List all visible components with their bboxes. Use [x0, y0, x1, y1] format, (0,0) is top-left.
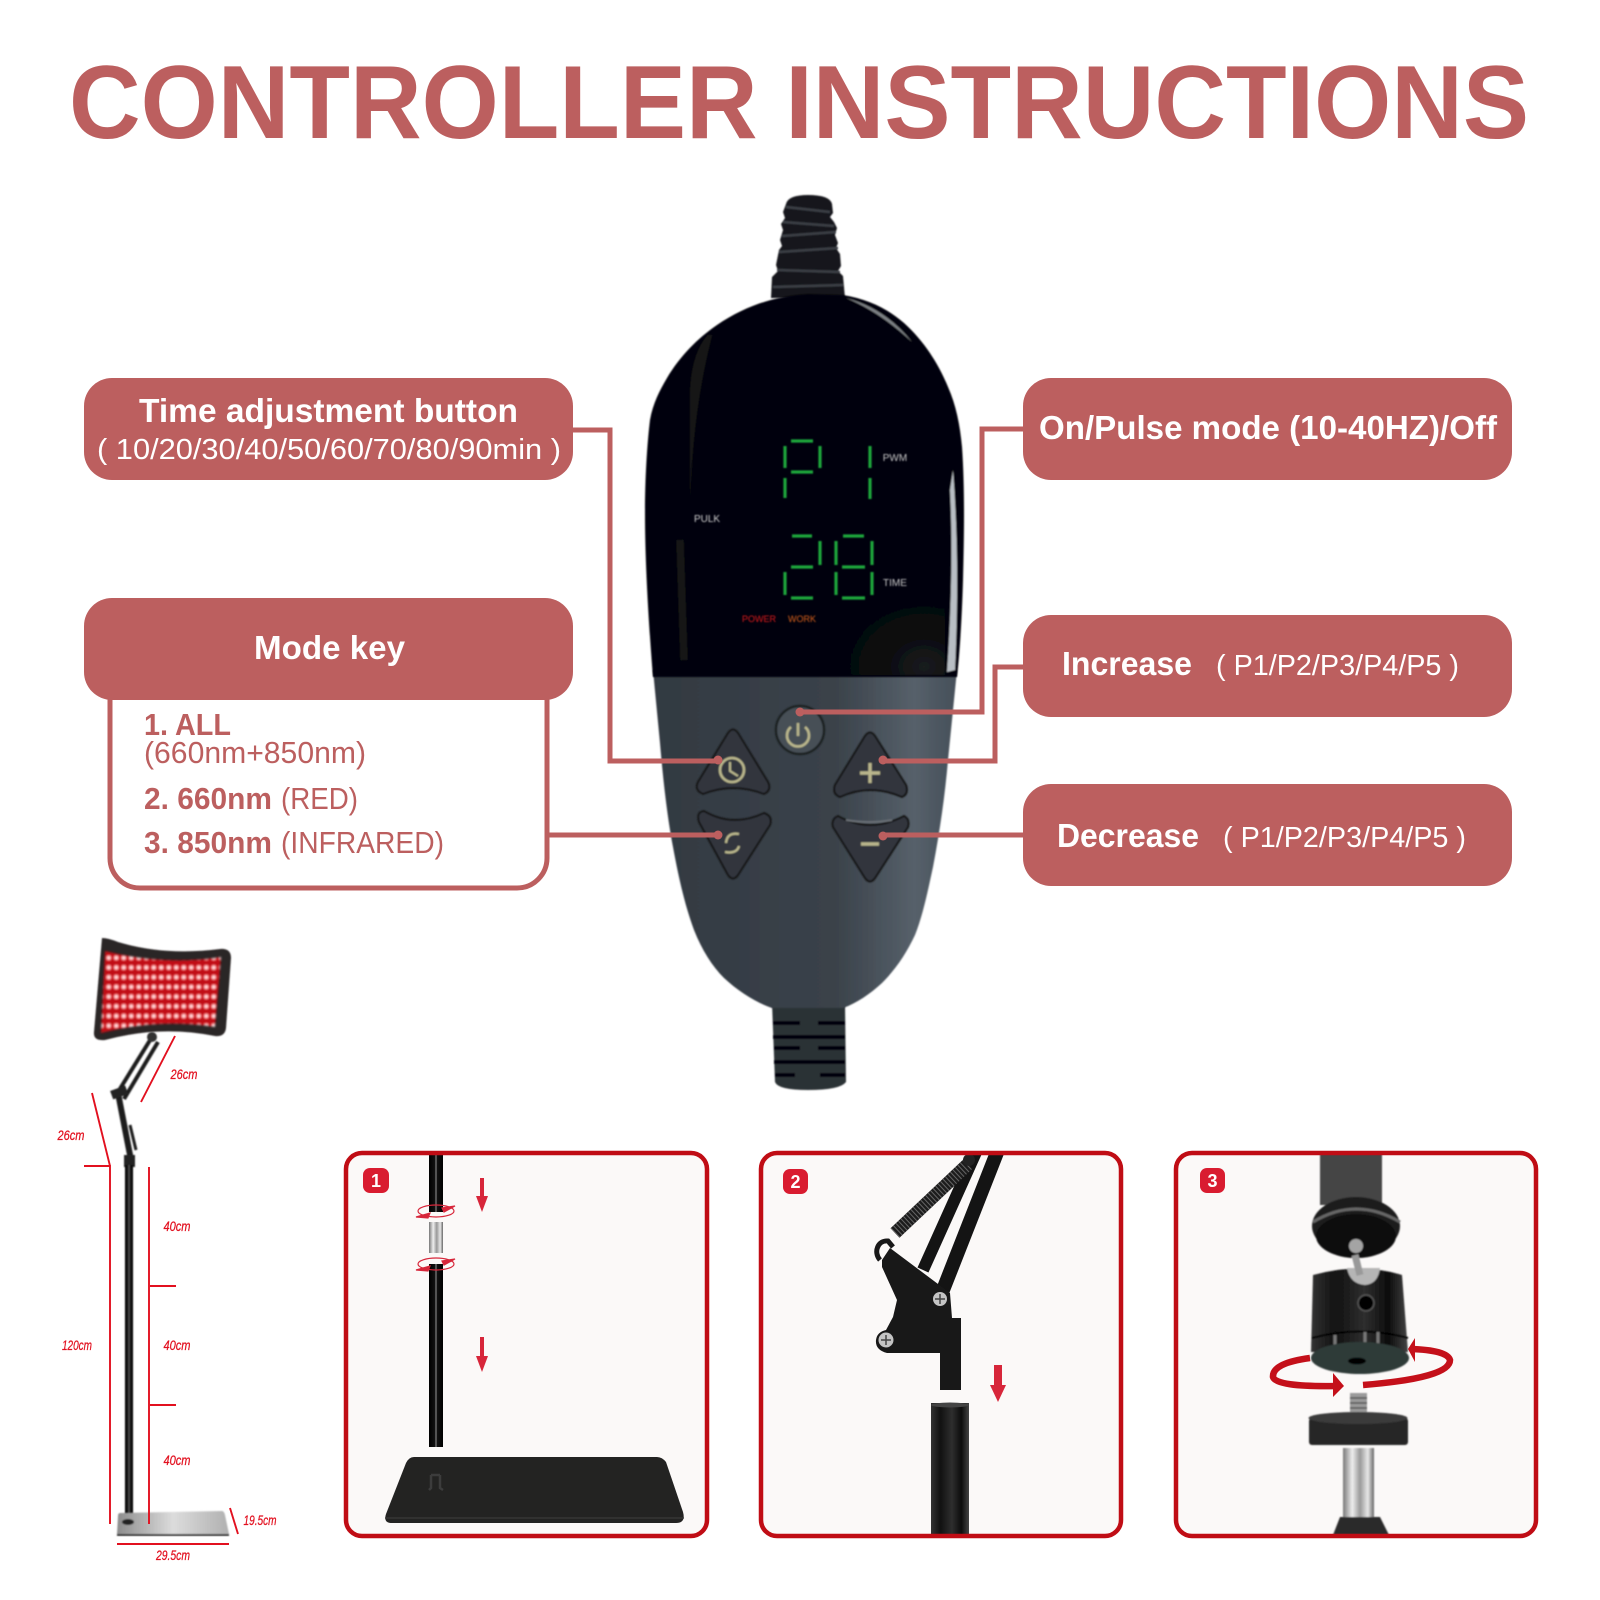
- controller black glossy upper body: [645, 294, 964, 677]
- step 2 frame: [761, 1153, 1121, 1536]
- base logo: [429, 1475, 443, 1490]
- label POWER: POWER: [742, 614, 776, 624]
- connector: mode key: [548, 830, 722, 840]
- mode key list box: [110, 660, 547, 888]
- controller top cable neck: [771, 195, 845, 298]
- title: CONTROLLER INSTRUCTIONS: [69, 45, 1529, 161]
- mode key heading: Mode key: [254, 629, 406, 666]
- mode 2: 2. 660nm: [144, 781, 272, 816]
- connector: time button: [573, 430, 722, 764]
- mode 2 detail: (RED): [281, 781, 358, 816]
- floor stand diagram: [57, 938, 277, 1563]
- mode 1 detail: (660nm+850nm): [144, 735, 366, 770]
- badge 3: 3: [1207, 1171, 1218, 1191]
- arrow down lower: [476, 1337, 488, 1372]
- dimension: upper 26cm: 26cm: [57, 1127, 85, 1143]
- mode 3: 3. 850nm: [144, 825, 272, 860]
- badge 1: [363, 1168, 389, 1193]
- connector: increase: [878, 667, 1023, 764]
- dimension: 29.5cm: 29.5cm: [155, 1547, 190, 1563]
- panel: step 2: [761, 1150, 1121, 1538]
- black base plate: [385, 1457, 684, 1523]
- callout: decrease: [1023, 784, 1512, 886]
- label PULSE: PULK: [694, 514, 720, 525]
- hook: [877, 1241, 893, 1260]
- step 3 frame: [1176, 1153, 1536, 1536]
- step 1 frame: [346, 1153, 707, 1536]
- LED panel: [94, 938, 231, 1040]
- dimension: 120cm: 120cm: [62, 1337, 92, 1353]
- callout: time adjustment button: [84, 378, 573, 480]
- screw upper: [933, 1292, 947, 1306]
- badge 1: 1: [371, 1171, 381, 1191]
- badge 3: [1200, 1168, 1225, 1193]
- dimension: section 40cm top: 40cm: [164, 1218, 191, 1234]
- mode 1: 1. ALL: [144, 707, 231, 742]
- callout: increase: [1023, 615, 1512, 717]
- panel: step 1: [346, 1150, 707, 1536]
- rotation arrows lower: [416, 1258, 455, 1271]
- badge 2: 2: [790, 1172, 801, 1192]
- decrease label: Decrease: [1057, 817, 1199, 854]
- stand base: [117, 1511, 229, 1535]
- screw lower: [878, 1332, 894, 1348]
- label TIME: TIME: [883, 578, 907, 589]
- time options: ( 10/20/30/40/50/60/70/80/90min ): [97, 434, 561, 466]
- controller device: [645, 195, 964, 1090]
- arrow down: [990, 1365, 1006, 1402]
- time heading: Time adjustment button: [139, 392, 518, 429]
- rotation arrows upper: [416, 1205, 455, 1218]
- digit 2: [785, 536, 820, 598]
- dimension lines: [84, 1036, 238, 1544]
- connector: decrease: [878, 832, 1023, 840]
- dimension: section 40cm middle: 40cm: [164, 1337, 191, 1353]
- silver connector: [429, 1222, 443, 1253]
- controller bottom cable neck: [772, 1003, 846, 1090]
- arrow down upper: [476, 1178, 488, 1212]
- label WORK: WORK: [788, 614, 816, 624]
- digit 1: [868, 446, 872, 499]
- digit P: [785, 441, 820, 498]
- dimension: arm 26cm: 26cm: [170, 1066, 198, 1082]
- LED display: [694, 441, 907, 624]
- mode key header: [84, 598, 573, 700]
- bracket plate: [876, 1248, 961, 1390]
- rotation arrow: [1273, 1338, 1450, 1397]
- mode button: [698, 811, 771, 878]
- on pulse text: On/Pulse mode (10-40HZ)/Off: [1039, 409, 1498, 446]
- decrease range: ( P1/P2/P3/P4/P5 ): [1223, 822, 1466, 854]
- connector: power: [796, 429, 1023, 716]
- increase button: [834, 732, 907, 797]
- panel: step 3: [1176, 1150, 1536, 1536]
- tube: [931, 1402, 969, 1538]
- stand pole and arm: [110, 1032, 158, 1520]
- label PWM: PWM: [883, 453, 907, 464]
- digit 8: [836, 536, 872, 598]
- decrease button: [833, 816, 908, 882]
- mode 3 detail: (INFRARED): [281, 825, 444, 860]
- callout: on / pulse / off: [1023, 378, 1512, 480]
- pole upper section: [429, 1150, 443, 1212]
- dimension: 19.5cm: 19.5cm: [244, 1512, 277, 1528]
- badge 2: [783, 1169, 808, 1194]
- increase range: ( P1/P2/P3/P4/P5 ): [1216, 650, 1459, 682]
- increase label: Increase: [1062, 645, 1192, 682]
- mount photo: [1308, 1150, 1409, 1535]
- panel: mode key: [84, 598, 573, 888]
- pole lower section: [429, 1264, 443, 1447]
- dimension: section 40cm bottom: 40cm: [164, 1452, 191, 1468]
- power button: [776, 706, 824, 754]
- controller grey lower body: [653, 670, 957, 1008]
- time button: [697, 730, 769, 794]
- spring and arms: [895, 1150, 998, 1290]
